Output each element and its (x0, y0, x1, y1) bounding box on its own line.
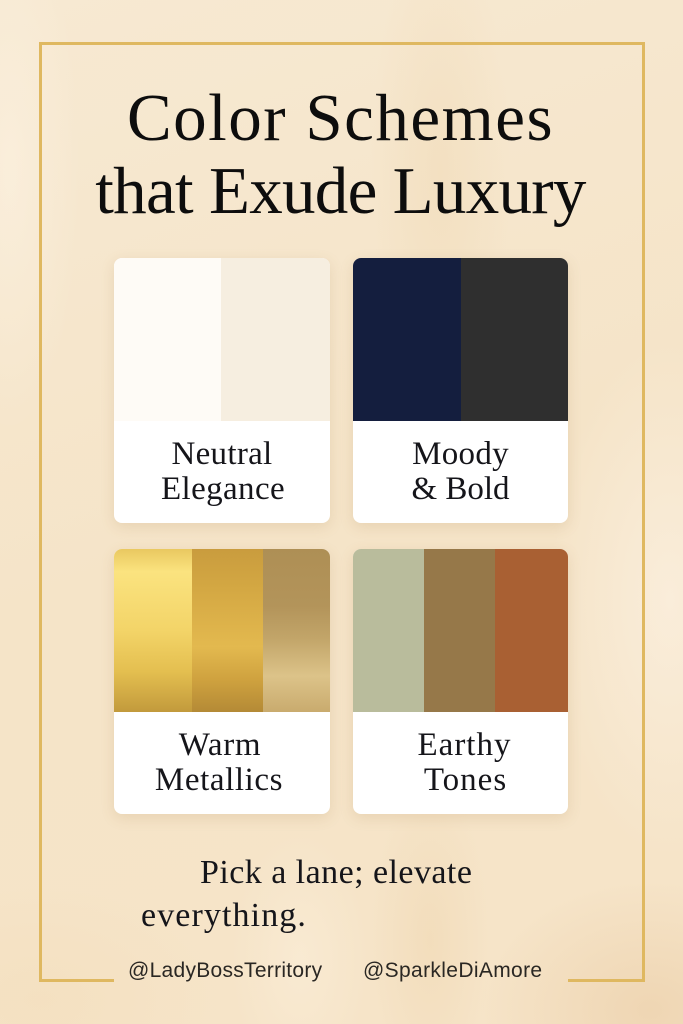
tagline: Pick a lane; elevate (200, 854, 472, 891)
handle: SparkleDiAmore: @SparkleDiAmore (363, 959, 542, 982)
label: moody and bold (411, 436, 510, 507)
label: warm metallics: Warm (179, 727, 261, 763)
panel: warm metallics (114, 549, 330, 814)
tagline (141, 854, 472, 934)
label: moody and bold: & Bold (411, 471, 510, 507)
label: warm metallics (155, 727, 283, 798)
label: moody and bold: Moody (412, 436, 509, 472)
swatch: rust (495, 549, 568, 712)
swatch: navy (353, 258, 461, 421)
title (95, 81, 586, 228)
label: earthy tones (418, 727, 511, 798)
swatch: light gold (114, 549, 192, 712)
tagline: everything. (141, 897, 307, 934)
label: warm metallics: Metallics (155, 762, 283, 798)
panel: earthy tones (353, 549, 568, 814)
label: neutral elegance: Neutral (171, 436, 273, 472)
label: neutral elegance: Elegance (161, 471, 285, 507)
swatch: cream (221, 258, 330, 421)
swatch: olive brown (424, 549, 495, 712)
swatch: deep gold (192, 549, 263, 712)
swatch: champagne gold (263, 549, 330, 712)
panel: neutral elegance (114, 258, 330, 523)
panel: moody and bold (353, 258, 568, 523)
swatch: sage (353, 549, 424, 712)
swatch: charcoal (461, 258, 568, 421)
title: Color Schemes (127, 81, 554, 155)
label: earthy tones: Tones (424, 762, 507, 798)
handle: LadyBossTerritory: @LadyBossTerritory (128, 959, 322, 982)
swatch: off white (114, 258, 221, 421)
label: neutral elegance (161, 436, 285, 507)
title: that Exude Luxury (95, 154, 586, 228)
label: earthy tones: Earthy (418, 727, 511, 763)
